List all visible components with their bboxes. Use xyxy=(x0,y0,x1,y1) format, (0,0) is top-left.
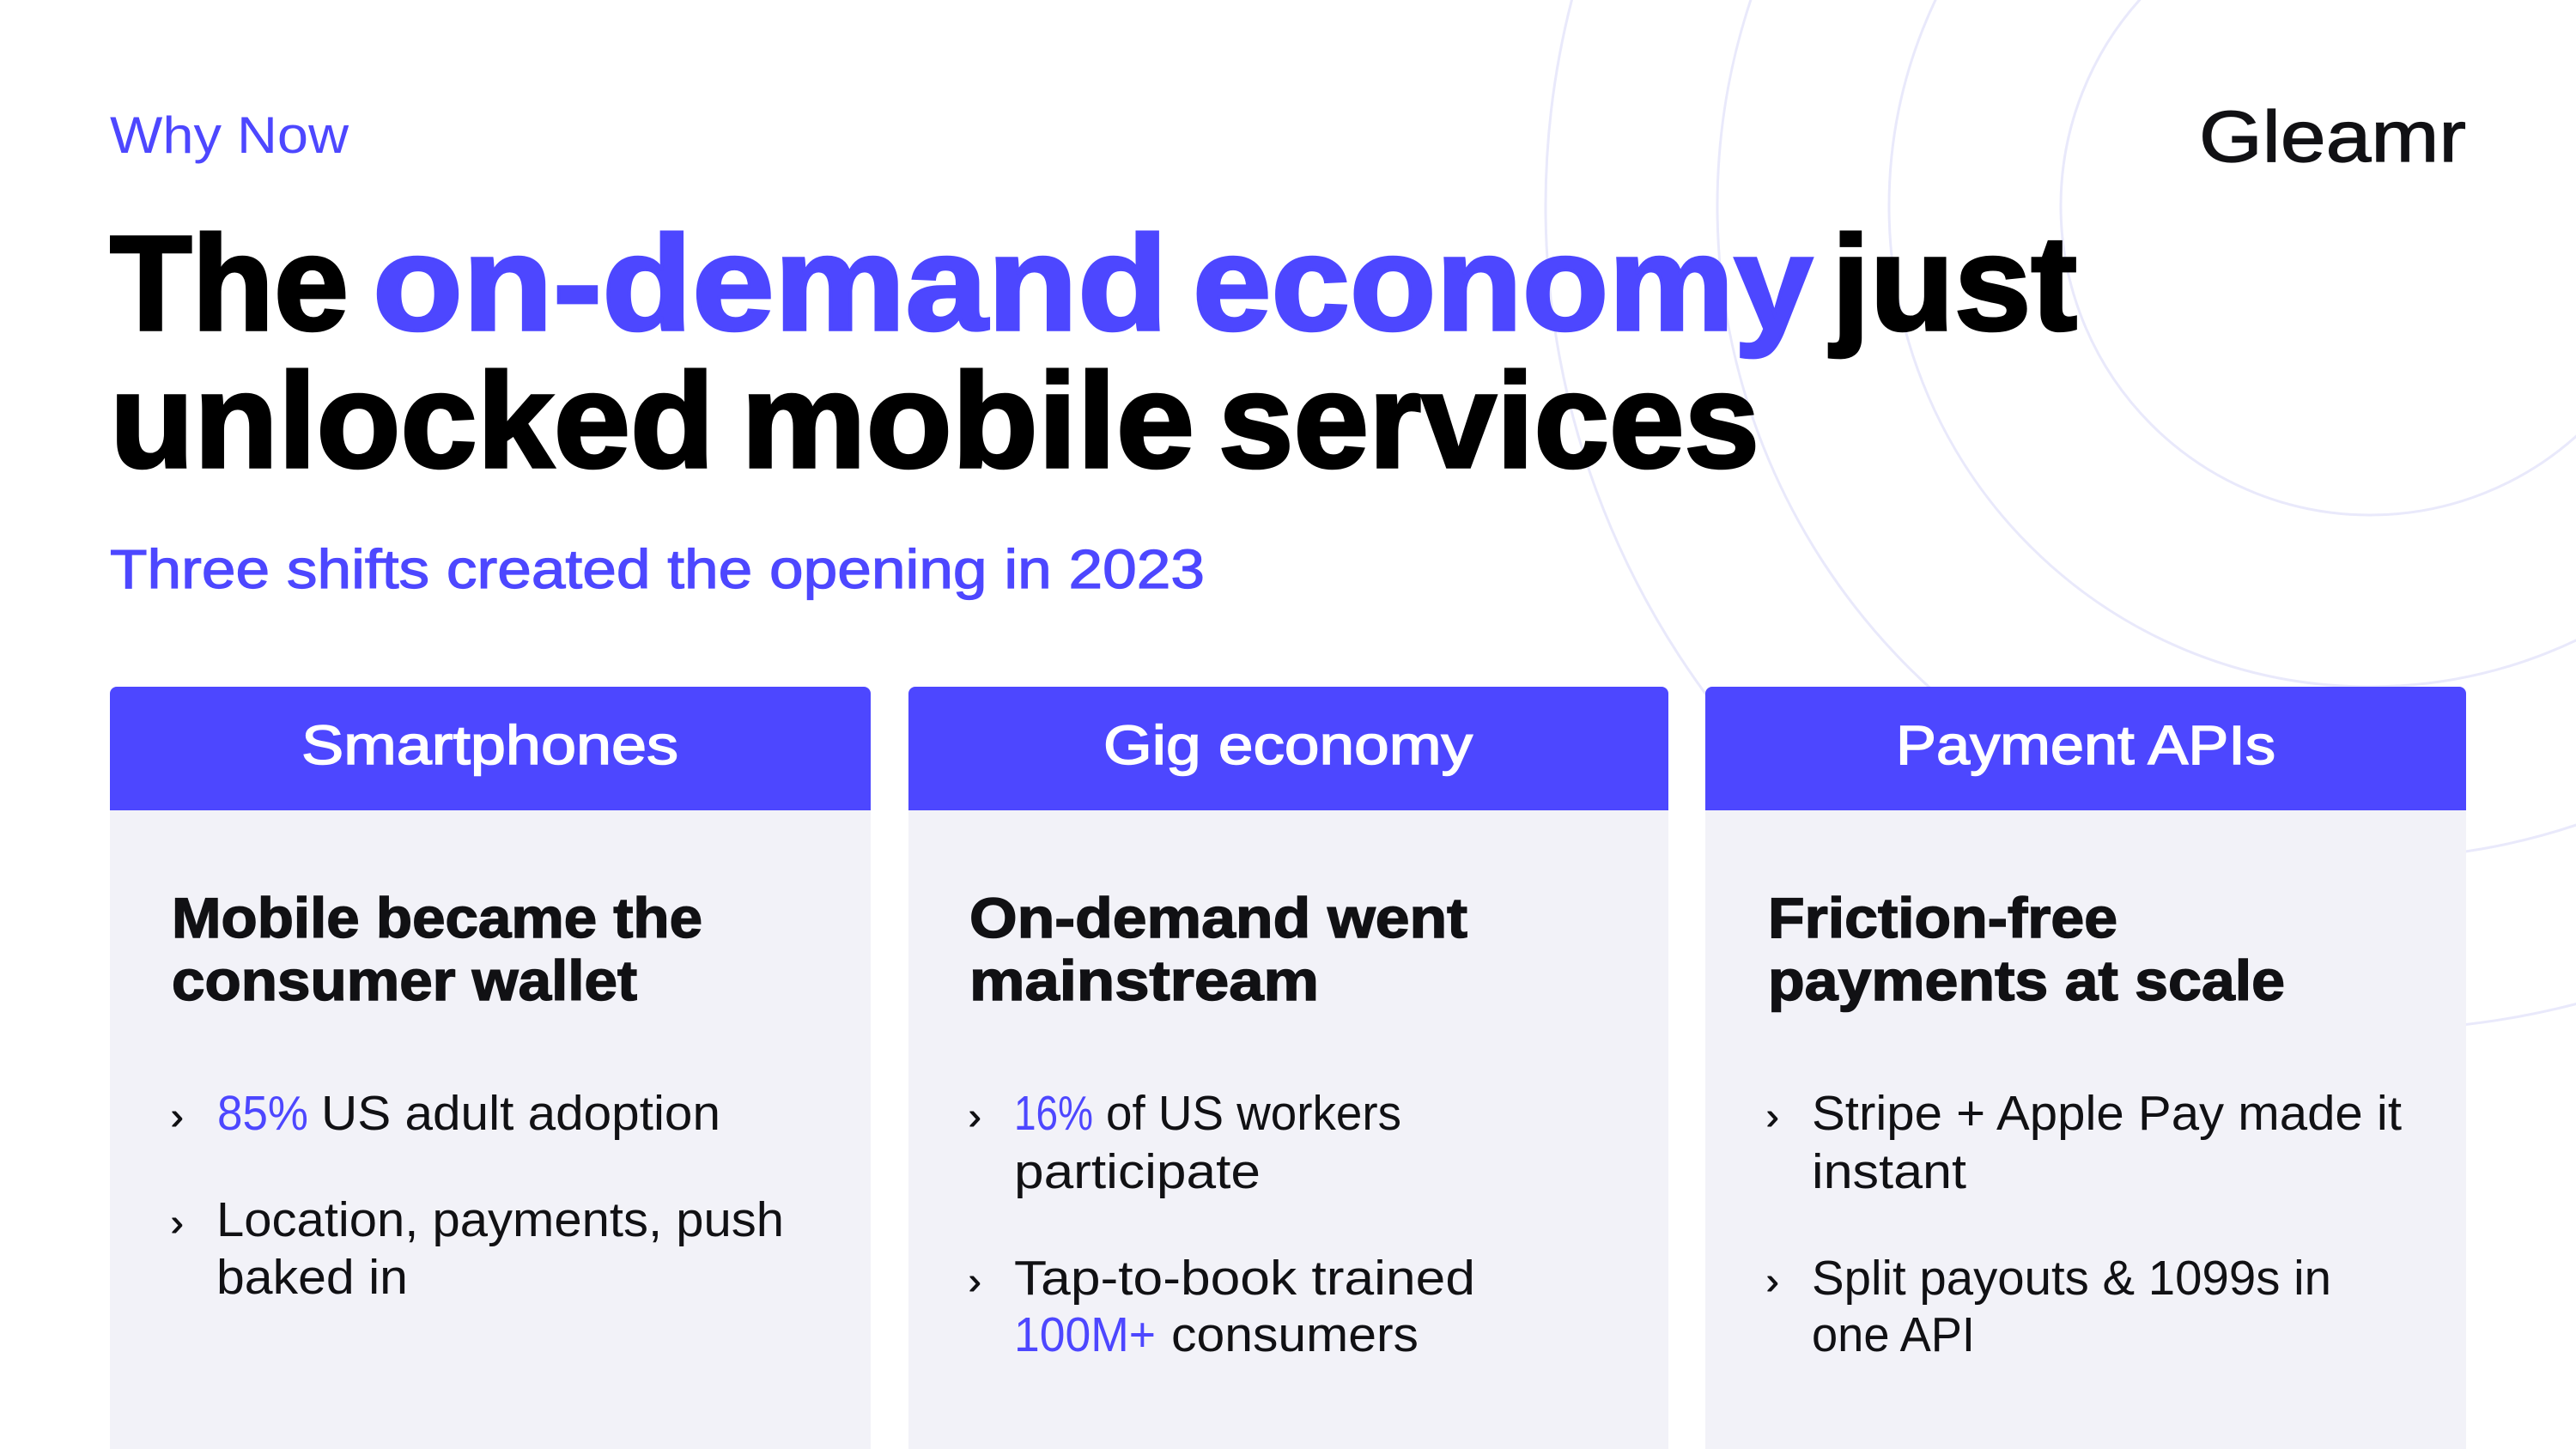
logo: Gleamr: Gleamr xyxy=(2199,96,2466,177)
card body xyxy=(908,687,1668,1449)
header label: Payment APIs xyxy=(1896,714,2275,776)
header label: Smartphones xyxy=(301,714,678,776)
subtitle: Three shifts created the opening in 2023 xyxy=(110,538,1205,600)
bullet: 85% US adult adoption: › xyxy=(171,1095,184,1137)
bullet: Split payouts & 1099s in one API: › xyxy=(1766,1260,1779,1302)
title: unlocked xyxy=(110,346,714,496)
card heading: consumer wallet xyxy=(172,949,637,1012)
title: economy xyxy=(1193,209,1813,359)
bullet: Tap-to-book trained 100M+ consumers: consumers xyxy=(1171,1307,1419,1362)
title xyxy=(110,209,2077,496)
bullet: Tap-to-book trained 100M+ consumers: Tap-to-book trained xyxy=(1014,1251,1475,1306)
bullet: 16% of US workers participate: participate xyxy=(1014,1144,1261,1199)
bullet: Location, payments, push baked in: › xyxy=(171,1202,184,1244)
panel: Smartphones xyxy=(110,687,871,1449)
card header xyxy=(908,687,1668,810)
bullet: Tap-to-book trained 100M+ consumers: › xyxy=(969,1260,981,1302)
card heading: Mobile became the xyxy=(172,886,702,949)
bullet: Split payouts & 1099s in one API xyxy=(1766,1251,2331,1362)
bullet: Stripe + Apple Pay made it instant: › xyxy=(1766,1095,1779,1137)
bullet: Location, payments, push baked in: baked in xyxy=(216,1250,408,1305)
bullet: 16% of US workers participate: of US workers xyxy=(1106,1086,1401,1141)
bullet: Tap-to-book trained 100M+ consumers xyxy=(969,1251,1475,1362)
bullet: 16% of US workers participate: 16% xyxy=(1014,1086,1093,1141)
card body xyxy=(1705,687,2466,1449)
card heading: payments at scale xyxy=(1768,949,2285,1012)
card header xyxy=(1705,687,2466,810)
bullet: Location, payments, push baked in: Location, payments, push xyxy=(216,1192,784,1247)
title: just xyxy=(1829,209,2077,359)
bullet: Stripe + Apple Pay made it instant: instant xyxy=(1812,1144,1966,1199)
card heading xyxy=(1768,886,2285,1012)
bullet: 85% US adult adoption: 85% xyxy=(217,1086,308,1141)
bullet: 16% of US workers participate xyxy=(969,1086,1401,1199)
card heading xyxy=(172,886,702,1012)
bullet: Split payouts & 1099s in one API: one API xyxy=(1812,1307,1975,1362)
card body xyxy=(110,687,871,1449)
title: services xyxy=(1218,346,1759,496)
title: The xyxy=(110,209,349,359)
panel: Payment APIs xyxy=(1705,687,2466,1449)
card heading xyxy=(969,886,1467,1012)
header label: Gig economy xyxy=(1103,714,1473,776)
title: mobile xyxy=(741,346,1194,496)
bullet: Stripe + Apple Pay made it instant xyxy=(1766,1086,2402,1199)
bullet: Split payouts & 1099s in one API: Split payouts & 1099s in xyxy=(1812,1251,2331,1306)
panel: Gig economy xyxy=(908,687,1668,1449)
bullet: Location, payments, push baked in xyxy=(171,1192,784,1305)
background concentric rings xyxy=(1546,0,2576,1030)
card heading: On-demand went xyxy=(969,886,1467,949)
bullet: 85% US adult adoption: US adult adoption xyxy=(321,1086,720,1141)
eyebrow: Why Now: Why Now xyxy=(110,106,349,164)
card header xyxy=(110,687,871,810)
card heading: Friction-free xyxy=(1768,886,2117,949)
card heading: mainstream xyxy=(969,949,1319,1012)
bullet: Tap-to-book trained 100M+ consumers: 100M+ xyxy=(1014,1307,1156,1362)
title: on-demand xyxy=(373,209,1168,359)
bullet: Stripe + Apple Pay made it instant: Stripe + Apple Pay made it xyxy=(1812,1086,2402,1141)
bullet: 16% of US workers participate: › xyxy=(969,1095,981,1137)
